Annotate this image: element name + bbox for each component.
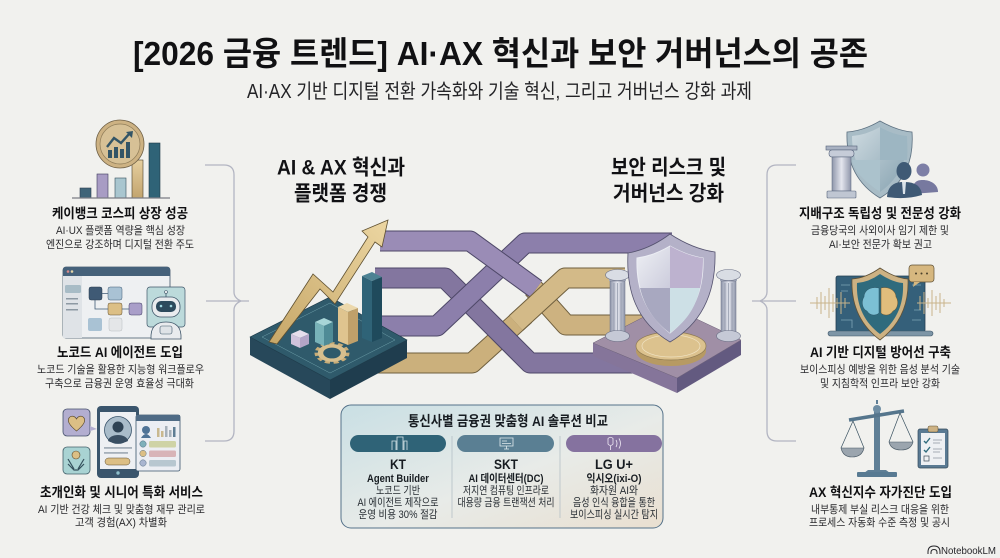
chart: interwoven braid xyxy=(360,241,672,363)
icon: building xyxy=(392,437,407,450)
left bracket xyxy=(205,165,249,441)
text: governance description: AI·보안 전문가 확보 권고 xyxy=(829,238,932,251)
heading: K bank: 케이뱅크 코스피 상장 성공 xyxy=(52,206,188,221)
icon: no-code window and robot xyxy=(63,267,185,339)
heading: hyper-personalization: 초개인화 및 시니어 특화 서비스 xyxy=(40,485,203,500)
column: right xyxy=(716,270,740,342)
heading: security risk and governance xyxy=(611,156,726,206)
text: governance description xyxy=(811,224,949,251)
heading: AX self-assessment: AX 혁신지수 자가진단 도입 xyxy=(809,485,952,500)
text: hyper-personalization description xyxy=(38,503,205,529)
bar: tan xyxy=(338,303,358,345)
illustration: growth platform xyxy=(250,220,407,399)
panel: telecom comparison xyxy=(341,405,663,528)
panel: right column xyxy=(799,121,962,529)
subtitle: AI·AX 기반 디지털 전환 가속화와 기술 혁신, 그리고 거버넌스 강화 과제 xyxy=(247,80,752,103)
column: left xyxy=(606,270,630,342)
icon: microphone xyxy=(608,437,620,450)
text: governance description: 금융당국의 사외이사 임기 제한 및 xyxy=(811,224,949,237)
column: LG U+: 익시오(ixi-O) xyxy=(586,472,642,485)
bar: dark teal xyxy=(362,272,382,342)
title: [2026 금융 트렌드] AI·AX 혁신과 보안 거버넌스의 공존 xyxy=(133,35,868,72)
icon: scales and checklist xyxy=(841,400,948,477)
column: SKT: AI 데이터센터(DC) xyxy=(468,471,544,485)
text: K bank description xyxy=(46,224,194,251)
text: K bank description: 엔진으로 강조하며 디지털 전환 주도 xyxy=(46,237,194,251)
panel heading: 통신사별 금융권 맞춤형 AI 솔루션 비교 xyxy=(408,413,608,429)
bar: teal xyxy=(315,318,333,346)
bar: lilac cube xyxy=(291,330,309,348)
heading: AI digital defense: AI 기반 디지털 방어선 구축 xyxy=(810,345,951,360)
text: hyper-personalization description: AI 기반 건강 체크 및 맞춤형 재무 관리로 xyxy=(38,503,205,516)
platform base xyxy=(593,305,741,393)
heading: security risk and governance: 보안 리스크 및 xyxy=(611,156,726,180)
text: no-code description: 구축으로 금융권 운영 효율성 극대화 xyxy=(45,377,194,390)
column: KT: 운영 비용 30% 절감 xyxy=(358,508,438,521)
text: no-code description xyxy=(37,363,204,390)
heading: security risk and governance: 거버넌스 강화 xyxy=(613,182,724,206)
column: KT: KT xyxy=(390,457,407,472)
divider lines xyxy=(452,436,560,518)
NotebookLM watermark: NotebookLM xyxy=(941,545,996,557)
column: LG U+: 화자원 AI와 xyxy=(590,485,638,497)
text: AX self-assessment description xyxy=(809,503,950,529)
panel: left column xyxy=(37,120,205,529)
text: digital defense description: 보이스피싱 예방을 위한 음성 분석 기술 xyxy=(800,363,960,376)
text: K bank description: AI·UX 플랫폼 역량을 핵심 성장 xyxy=(56,224,185,237)
icon: shield, column and people xyxy=(826,121,938,198)
icon: brain shield and sound waves xyxy=(810,265,951,340)
icon: monitor xyxy=(500,438,513,449)
text: hyper-personalization description: 고객 경험(AX) 차별화 xyxy=(75,516,167,529)
column: SKT xyxy=(457,435,554,509)
text: no-code description: 노코드 기술을 활용한 지능형 워크플로우 xyxy=(37,363,204,376)
heading: AI and AX innovation: AI & AX 혁신과 xyxy=(277,156,405,180)
icon: senior service phone xyxy=(63,406,180,478)
gear xyxy=(317,344,347,362)
column: SKT: SKT xyxy=(494,457,519,472)
column: LG U+: LG U+ xyxy=(595,457,633,472)
column: LG U+ xyxy=(566,435,662,521)
column: KT: AI 에이전트 제작으로 xyxy=(358,497,439,509)
column: LG U+: 음성 인식 융합을 통한 xyxy=(573,497,655,509)
arrow: rising trend xyxy=(269,220,388,344)
heading: AI and AX innovation xyxy=(277,156,405,206)
column: LG U+: 보이스피싱 실시간 탐지 xyxy=(570,509,658,521)
text: digital defense description: 및 지침학적 인프라 보안 강화 xyxy=(820,377,940,390)
right bracket xyxy=(752,165,796,441)
column: KT: Agent Builder xyxy=(367,473,430,485)
text: AX self-assessment description: 내부통제 부실 리스크 대응을 위한 xyxy=(811,503,949,516)
column: KT: 노코드 기반 xyxy=(376,485,420,497)
heading: no-code AI agent: 노코드 AI 에이전트 도입 xyxy=(57,345,183,360)
column: SKT: 대용량 금융 트랜잭션 처리 xyxy=(458,497,554,509)
gold disc xyxy=(636,332,706,366)
illustration: security platform xyxy=(593,234,741,393)
heading: governance independence: 지배구조 독립성 및 전문성 강화 xyxy=(799,206,962,221)
column: KT xyxy=(350,435,446,521)
icon: large shield xyxy=(628,234,715,342)
text: AX self-assessment description: 프로세스 자동화 수준 측정 및 공시 xyxy=(809,516,950,529)
icon: growth bars and coin xyxy=(72,120,170,198)
text: digital defense description xyxy=(800,363,960,390)
heading: AI and AX innovation: 플랫폼 경쟁 xyxy=(294,182,387,206)
platform base xyxy=(250,297,407,399)
column: SKT: 저지연 컴퓨팅 인프라로 xyxy=(463,485,549,497)
